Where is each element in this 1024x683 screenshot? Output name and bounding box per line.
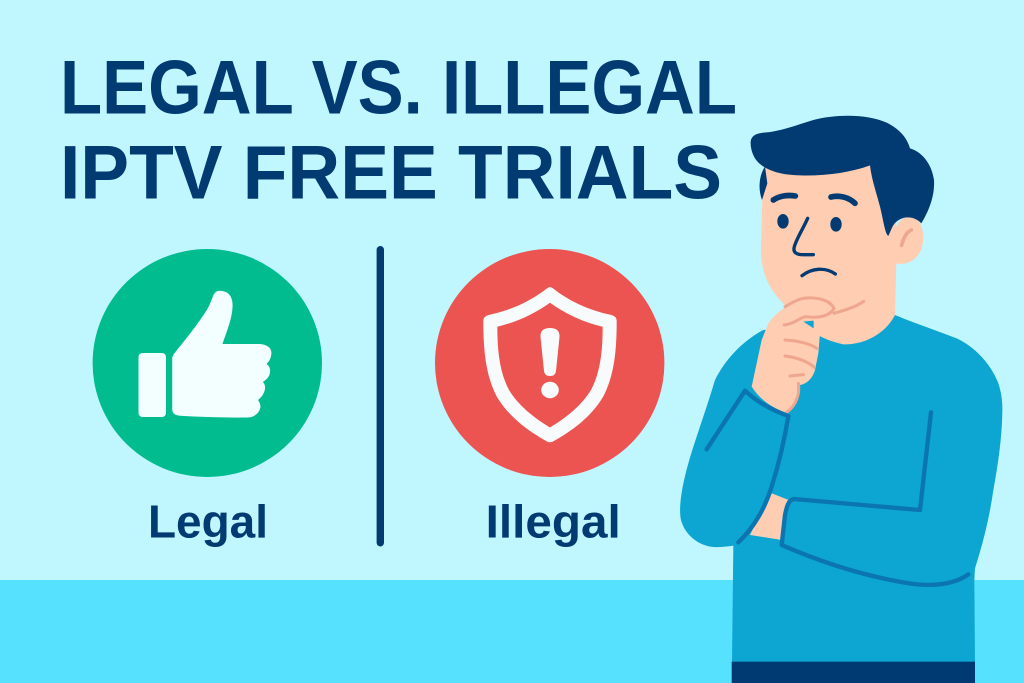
torso and sleeves	[680, 315, 1002, 683]
face	[761, 147, 897, 344]
panel: legal	[93, 249, 322, 548]
title: IPTV FREE TRIALS	[60, 130, 722, 216]
title	[60, 46, 737, 216]
finger lines	[784, 298, 834, 412]
label: Legal: Legal	[148, 496, 268, 548]
blue gap between finger and thumb	[803, 321, 814, 328]
raised arm	[707, 297, 968, 585]
ear detail	[902, 230, 911, 245]
mouth	[802, 269, 835, 276]
panel: illegal	[435, 249, 664, 548]
divider	[377, 246, 384, 546]
jaw line	[834, 301, 864, 313]
eyebrows	[773, 195, 795, 200]
hair	[751, 116, 934, 236]
trousers	[732, 662, 975, 683]
title: LEGAL VS. ILLEGAL	[60, 46, 737, 130]
label: Illegal: Illegal	[486, 496, 621, 548]
lower hand	[750, 493, 789, 540]
icon: green circle with thumbs up	[93, 249, 322, 477]
nose	[794, 218, 813, 255]
hair back	[760, 167, 767, 200]
sleeve lines	[707, 391, 968, 585]
raised hand	[752, 297, 833, 412]
head and neck	[751, 116, 934, 344]
eyes	[777, 214, 789, 229]
figure: thinking man	[680, 116, 1002, 683]
icon: red circle with warning shield	[435, 249, 664, 477]
ear	[893, 217, 923, 264]
